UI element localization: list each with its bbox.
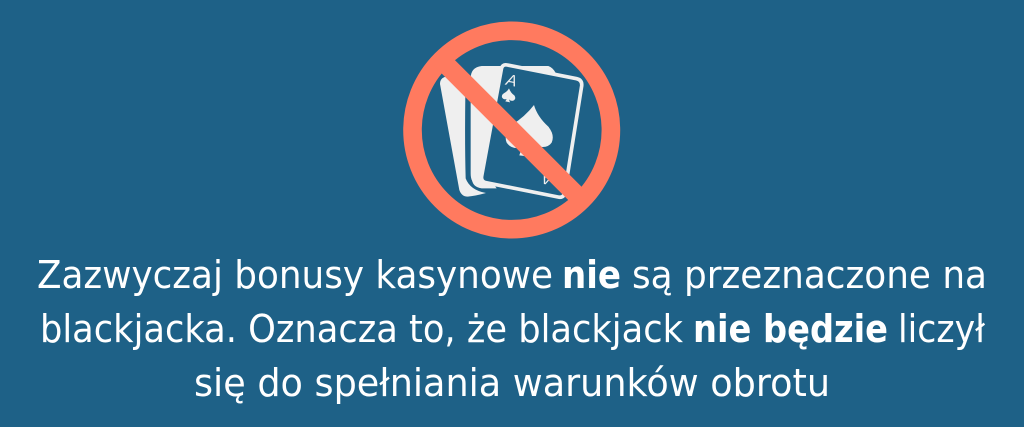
text line 2: blackjacka. Oznacza to, że blackjack xyxy=(40,307,683,351)
text line 1 xyxy=(37,253,987,297)
text line 2: liczył xyxy=(898,307,985,351)
icon: prohibition slash xyxy=(441,60,582,200)
text line 1: nie xyxy=(562,253,621,297)
icon: ace of spades card: A xyxy=(504,72,518,91)
text line 3: się do spełniania warunków obrotu xyxy=(194,361,830,405)
icon: ace of spades card xyxy=(482,65,582,197)
icon: ace of spades card: A xyxy=(540,169,555,188)
icon: fanned back cards xyxy=(440,66,556,197)
text block: caption xyxy=(37,253,987,405)
text line 1: są przeznaczone na xyxy=(632,253,987,297)
icon: prohibition ring xyxy=(412,31,611,229)
text line 1: Zazwyczaj bonusy kasynowe xyxy=(37,253,553,297)
icon: prohibited playing cards xyxy=(412,31,611,229)
text line 2: nie będzie xyxy=(693,307,888,351)
